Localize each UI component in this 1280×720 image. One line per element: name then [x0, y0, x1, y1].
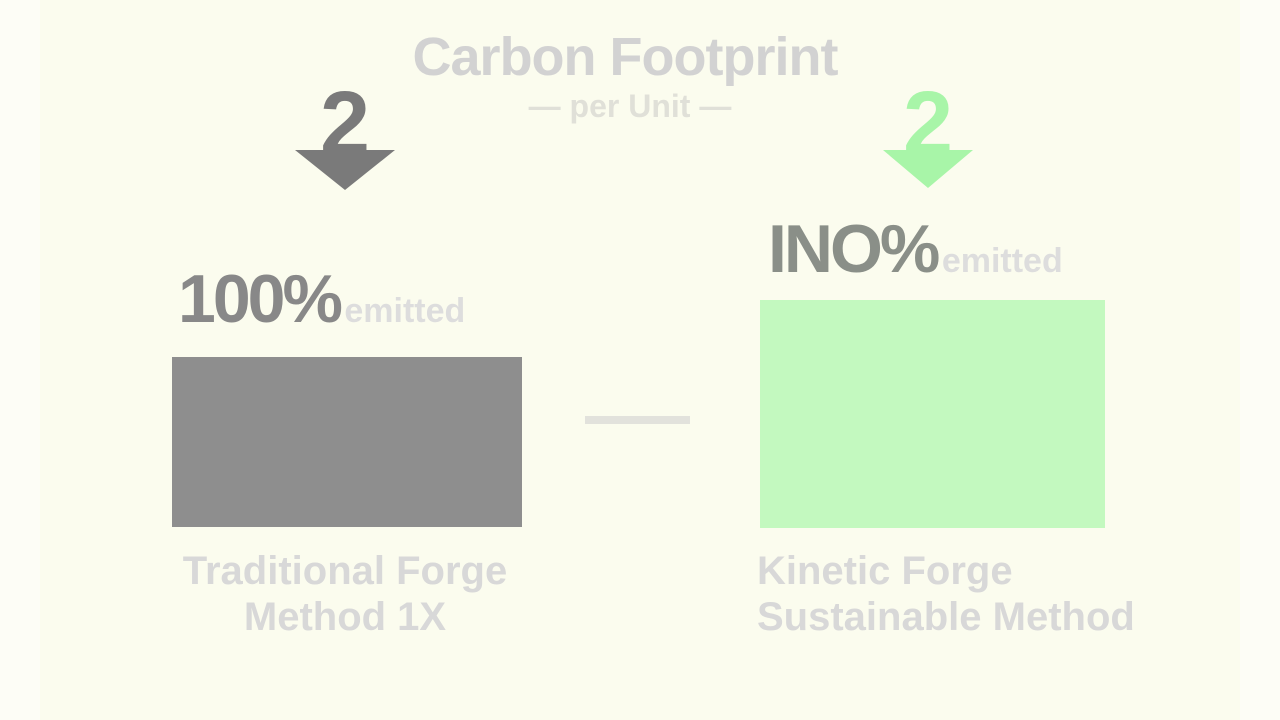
traditional bar — [172, 357, 522, 527]
sustainable label: Kinetic Forge — [757, 549, 1013, 593]
icon: green arrow — [883, 78, 973, 188]
icon: gray arrow — [295, 78, 395, 190]
sustainable label: Sustainable Method — [757, 595, 1135, 639]
title: Carbon Footprint — [413, 27, 837, 87]
traditional label — [183, 549, 507, 639]
sustainable value: INO% emitted — [768, 211, 1063, 287]
subtitle: — per Unit — — [529, 88, 731, 124]
connector dash — [585, 416, 690, 424]
traditional label: Traditional Forge — [183, 549, 507, 593]
traditional label: Method 1X — [244, 595, 446, 639]
traditional value: 100% emitted — [178, 261, 465, 337]
sustainable label — [757, 549, 1135, 639]
sustainable bar — [760, 300, 1105, 528]
